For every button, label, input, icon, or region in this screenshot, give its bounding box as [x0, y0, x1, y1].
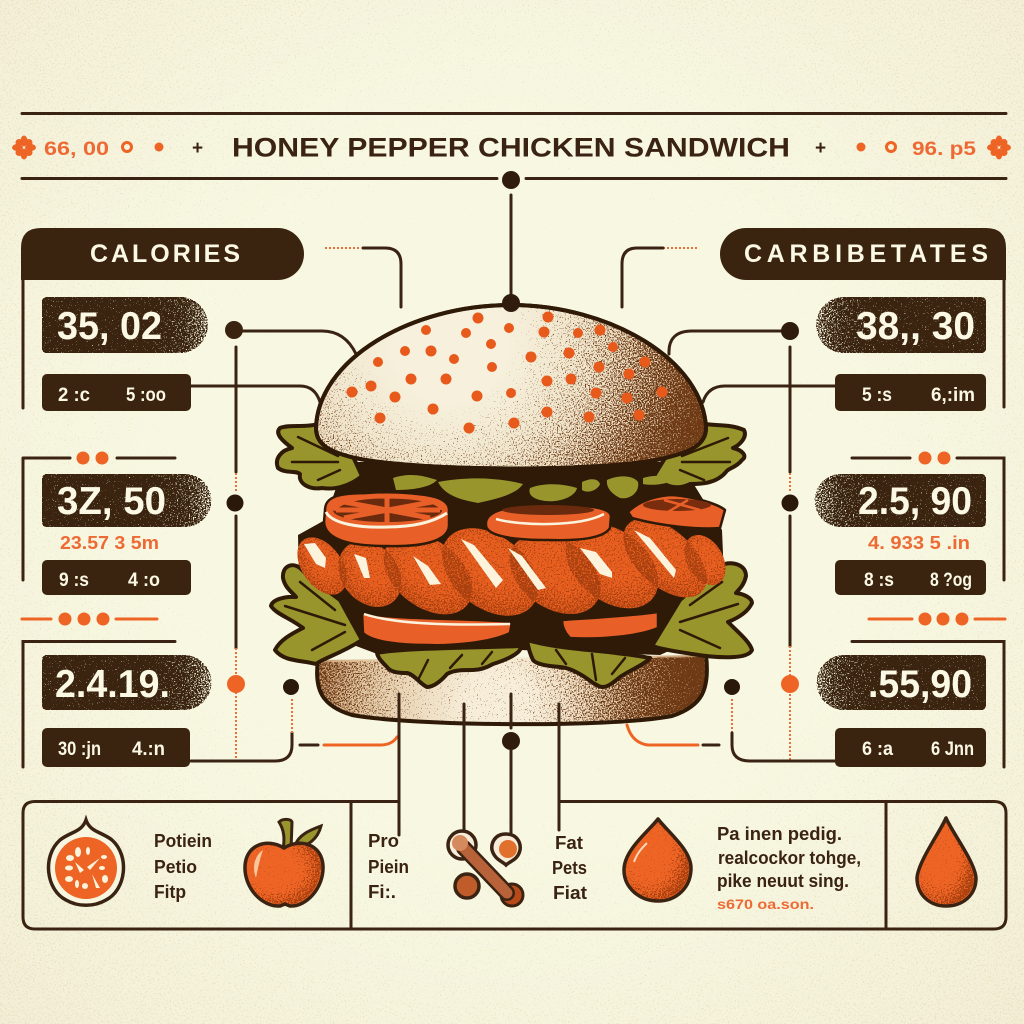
value: 3Z, 50 — [42, 474, 212, 527]
detail row 3 — [42, 728, 190, 767]
detail row 2 — [42, 560, 191, 595]
panel: calories — [21, 228, 304, 767]
text: protein middle: Pro — [368, 831, 399, 851]
text: protein middle: Piein — [368, 857, 409, 877]
detail row 1: 2 :c — [58, 385, 90, 406]
detail row 3 right: 6 Jnn — [931, 739, 974, 760]
icon: apple — [245, 819, 323, 906]
text: protein left: Fitp — [154, 882, 186, 902]
left diamond ornament — [154, 142, 164, 152]
carbohydrates heading — [720, 228, 1006, 280]
text: fat — [552, 833, 587, 903]
detail row 1 right — [835, 374, 986, 411]
value: 2.5, 90: 2.5, 90 — [858, 480, 972, 523]
dark sandwich filling backing — [298, 462, 726, 655]
lower lettuce left — [271, 565, 362, 664]
detail row 1: 5 :oo — [126, 385, 166, 406]
value: 2.4.19 — [42, 655, 211, 710]
detail row 1 right: 6,:im — [931, 385, 975, 406]
text: fat: Fiat — [553, 883, 587, 903]
text: description: s670 oa.son. — [717, 896, 814, 912]
text: description — [717, 824, 861, 912]
lower lettuce right — [652, 563, 752, 657]
value: 38,, 30: 38,, 30 — [856, 305, 975, 348]
upper lettuce left — [277, 424, 362, 488]
calories heading: CALORIES — [90, 240, 240, 268]
detail row 1 right: 5 :s — [862, 385, 892, 406]
value: 2.4.19: 2.4.19. — [55, 663, 170, 706]
fried chicken — [287, 504, 734, 634]
text: fat: Pets — [552, 858, 587, 878]
left plus ornament: + — [192, 138, 203, 159]
panel: bottom legend — [23, 802, 1006, 929]
orange sub-value right: 4. 933 5 .in — [868, 533, 970, 553]
calories heading — [21, 228, 304, 280]
icon: drop 1 — [624, 819, 691, 901]
detail row 3 right — [835, 728, 986, 767]
left ring ornament — [122, 142, 132, 152]
detail row 2 right — [835, 560, 986, 595]
tomato slice 2 — [486, 505, 611, 540]
text: protein left — [154, 831, 212, 902]
right header figures: 96. p5 — [912, 139, 977, 160]
bottom bun — [317, 655, 707, 724]
upper lettuce centre — [393, 475, 673, 503]
value: 38,, 30 — [816, 297, 986, 353]
value: .55,90 — [817, 655, 986, 710]
text: protein middle: Fi:. — [368, 882, 396, 902]
detail row 3: 4.:n — [132, 739, 165, 760]
right ornament flower — [987, 136, 1011, 160]
icon: drop 2 — [917, 818, 976, 906]
tomato slice 4 — [362, 613, 512, 645]
sandwich illustration — [271, 294, 752, 835]
value: 35, 02 — [42, 297, 208, 353]
top bun — [316, 294, 708, 473]
detail row 3: 30 :jn — [58, 739, 101, 760]
value: 35, 02: 35, 02 — [57, 305, 162, 348]
text: protein left: Potiein — [154, 831, 212, 851]
leader lines over bottom bun — [399, 694, 559, 835]
chicken highlights — [304, 530, 676, 590]
carbohydrates heading: CARBIBETATES — [744, 240, 988, 268]
title: HONEY PEPPER CHICKEN SANDWICH — [232, 132, 790, 162]
text: protein left: Petio — [154, 857, 197, 877]
right plus ornament: + — [815, 138, 826, 159]
header band — [12, 114, 1011, 178]
sesame seeds — [346, 312, 668, 434]
tomato slice 5 — [562, 612, 658, 639]
left ornament flower — [12, 136, 36, 160]
left header figures: 66, 00 — [44, 139, 109, 160]
header rule bottom — [22, 177, 1006, 180]
connector lines — [191, 171, 835, 834]
header rule top — [22, 112, 1006, 115]
value: .55,90: .55,90 — [868, 663, 972, 706]
right ring ornament — [886, 142, 896, 152]
detail row 2: 9 :s — [59, 570, 89, 591]
icon: bone — [448, 831, 523, 906]
orange sub-value left: 23.57 3 5m — [60, 533, 159, 553]
upper lettuce right — [654, 424, 745, 487]
detail row 3 right: 6 :a — [862, 739, 893, 760]
tomato slice 3 — [628, 495, 725, 529]
tomato slice 1 — [324, 493, 449, 546]
text: protein middle — [368, 831, 409, 902]
text: description: pike neuut sing. — [717, 871, 849, 891]
detail row 2: 4 :o — [128, 570, 160, 591]
detail row 1 — [42, 374, 191, 411]
icon: fig — [49, 820, 123, 905]
right diamond ornament — [856, 142, 866, 152]
text: description: realcockor tohge, — [718, 848, 861, 868]
value: 3Z, 50: 3Z, 50 — [57, 480, 166, 523]
lower lettuce centre right — [527, 640, 650, 687]
text: description: Pa inen pedig. — [717, 824, 842, 844]
detail row 2 right: 8 ?og — [930, 570, 972, 591]
detail row 2 right: 8 :s — [864, 570, 894, 591]
value: 2.5, 90 — [814, 474, 986, 527]
panel: carbohydrates — [720, 228, 1006, 767]
text: fat: Fat — [555, 833, 583, 853]
lower lettuce centre — [377, 646, 521, 687]
